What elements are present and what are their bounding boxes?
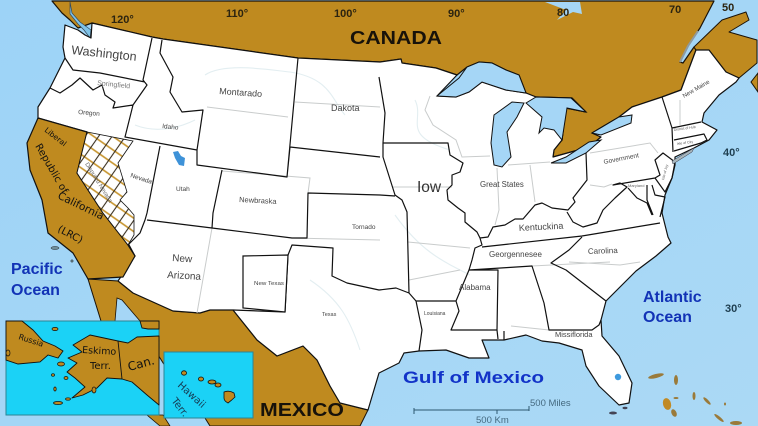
- ocean label: Atlantic Ocean: Ocean: [643, 309, 692, 326]
- label: Utah: Utah: [176, 186, 190, 193]
- Liberal Republic of California territory: [27, 118, 135, 279]
- label: Hawaii: Hawaii: [175, 380, 207, 411]
- label: Louisiana: Louisiana: [424, 311, 446, 317]
- label: Can.: Can.: [126, 353, 156, 374]
- Lake Okeechobee: [615, 374, 621, 380]
- Canada landmass: [52, 1, 714, 157]
- label: Iow: Iow: [417, 179, 442, 196]
- label: 500 Miles: 500 Miles: [530, 398, 571, 409]
- Mexico and Baja landmass: [88, 279, 368, 426]
- label: Tornado: Tornado: [352, 224, 376, 231]
- black state borders: [50, 38, 707, 351]
- label: 120: 120°: [111, 14, 134, 26]
- label: Liberal: Liberal: [43, 125, 68, 148]
- latitude and longitude labels: [111, 2, 742, 315]
- inset water: [164, 352, 253, 418]
- handwritten label: Liberal Republic of California: [32, 125, 106, 246]
- inset water: [6, 321, 159, 415]
- Lake Michigan: [491, 102, 524, 167]
- label: Eskimo: Eskimo: [82, 345, 117, 358]
- Aleutian islands: [6, 327, 96, 404]
- inset Canada border: [118, 341, 122, 379]
- ocean label: Pacific Ocean: Pacific: [11, 261, 63, 278]
- label: Maryland: Maryland: [628, 183, 644, 188]
- label: New: New: [172, 253, 193, 265]
- state labels: [71, 43, 712, 339]
- St Lawrence river bank: [680, 31, 698, 62]
- label: 50: 50: [722, 2, 734, 14]
- label: Government: Government: [603, 152, 640, 166]
- label: Terr.: Terr.: [89, 361, 111, 372]
- label: Georgennesee: Georgennesee: [489, 250, 542, 259]
- Hawaiian islands: [182, 371, 235, 403]
- label: Kentuckina: Kentuckina: [519, 221, 564, 233]
- scale line: [414, 406, 529, 414]
- label: 80: 80: [557, 7, 569, 19]
- heading: CANADA: CANADA: [350, 28, 442, 48]
- label: 70: 70: [669, 4, 681, 16]
- Disputed Nevada hatched region: [77, 132, 134, 245]
- Lake Erie: [551, 140, 601, 163]
- Great Salt Lake: [173, 151, 185, 166]
- James Bay water: [545, 2, 582, 20]
- Pacific islands: [51, 246, 73, 262]
- label: New Texas: New Texas: [254, 281, 284, 287]
- label: Nevada: Nevada: [129, 172, 153, 186]
- label: California: California: [56, 190, 106, 223]
- faint rivers: [135, 68, 470, 350]
- label: 500 Km: 500 Km: [476, 415, 509, 426]
- label: Texas: Texas: [322, 312, 337, 318]
- panel: Hawaii inset: [164, 352, 253, 419]
- Puget Sound water: [70, 2, 91, 38]
- heading: MEXICO: MEXICO: [260, 400, 344, 420]
- label: 100: 100°: [334, 8, 357, 20]
- label: Terr.: Terr.: [168, 395, 190, 419]
- grey internal boundaries: [197, 96, 680, 330]
- label: 30: 30°: [725, 303, 742, 315]
- label: Republic of: Republic of: [32, 142, 70, 196]
- Gulf of California water: [115, 298, 140, 321]
- northern Canadian fragment: [140, 321, 159, 329]
- label: Great States: Great States: [480, 180, 524, 189]
- Caribbean islands: [609, 372, 742, 425]
- Lake Superior: [437, 62, 526, 97]
- label: 90: 90°: [448, 8, 465, 20]
- ocean label: Atlantic Ocean: [643, 289, 702, 326]
- label: Carolina: Carolina: [588, 246, 618, 256]
- scale bar: [414, 398, 571, 426]
- label: Disputed Nevada: Disputed Nevada: [83, 162, 113, 205]
- label: 40: 40°: [723, 147, 740, 159]
- label: Montarado: Montarado: [219, 86, 262, 99]
- label: Alabama: Alabama: [459, 283, 491, 292]
- New Texas box: [243, 255, 288, 312]
- ocean label: Gulf of Mexico: Gulf of Mexico: [403, 368, 544, 387]
- label: 110: 110°: [226, 8, 248, 20]
- label: small New England state: District of Hub: [674, 125, 696, 132]
- label: Dakota: Dakota: [331, 103, 360, 113]
- label: Newbraska: Newbraska: [239, 195, 278, 206]
- Canadian maritime land: [694, 12, 757, 78]
- Nova Scotia fragment: [751, 73, 758, 92]
- Lake Huron: [526, 97, 586, 140]
- Long Island: [672, 148, 694, 164]
- label: Isle of Rhode: Isle of City: [677, 140, 694, 146]
- ocean label: Pacific Ocean: Ocean: [11, 282, 60, 299]
- label: Idaho: Idaho: [162, 123, 179, 132]
- label: Missiflorida: Missiflorida: [555, 330, 593, 339]
- Baja tip: [147, 415, 170, 426]
- Eskimo Territory land: [67, 335, 159, 405]
- Lake Ontario: [592, 115, 632, 135]
- label: Arizona: Arizona: [167, 270, 202, 283]
- ocean label: Pacific Ocean: [11, 261, 63, 299]
- label: Oregon: Oregon: [78, 109, 100, 118]
- label: Russia: Russia: [17, 332, 45, 349]
- label: Jersey strip: Isle of Joy: [661, 164, 669, 180]
- label: New Maine: New Maine: [682, 79, 712, 100]
- panel: Alaska inset: [6, 321, 159, 415]
- ocean label: Atlantic Ocean: Atlantic: [643, 289, 702, 306]
- Russia land: [6, 321, 63, 364]
- label: LRC: (LRC): [56, 224, 85, 246]
- label: Washington: Washington: [71, 43, 137, 64]
- label: Springfield: Springfield: [97, 80, 131, 90]
